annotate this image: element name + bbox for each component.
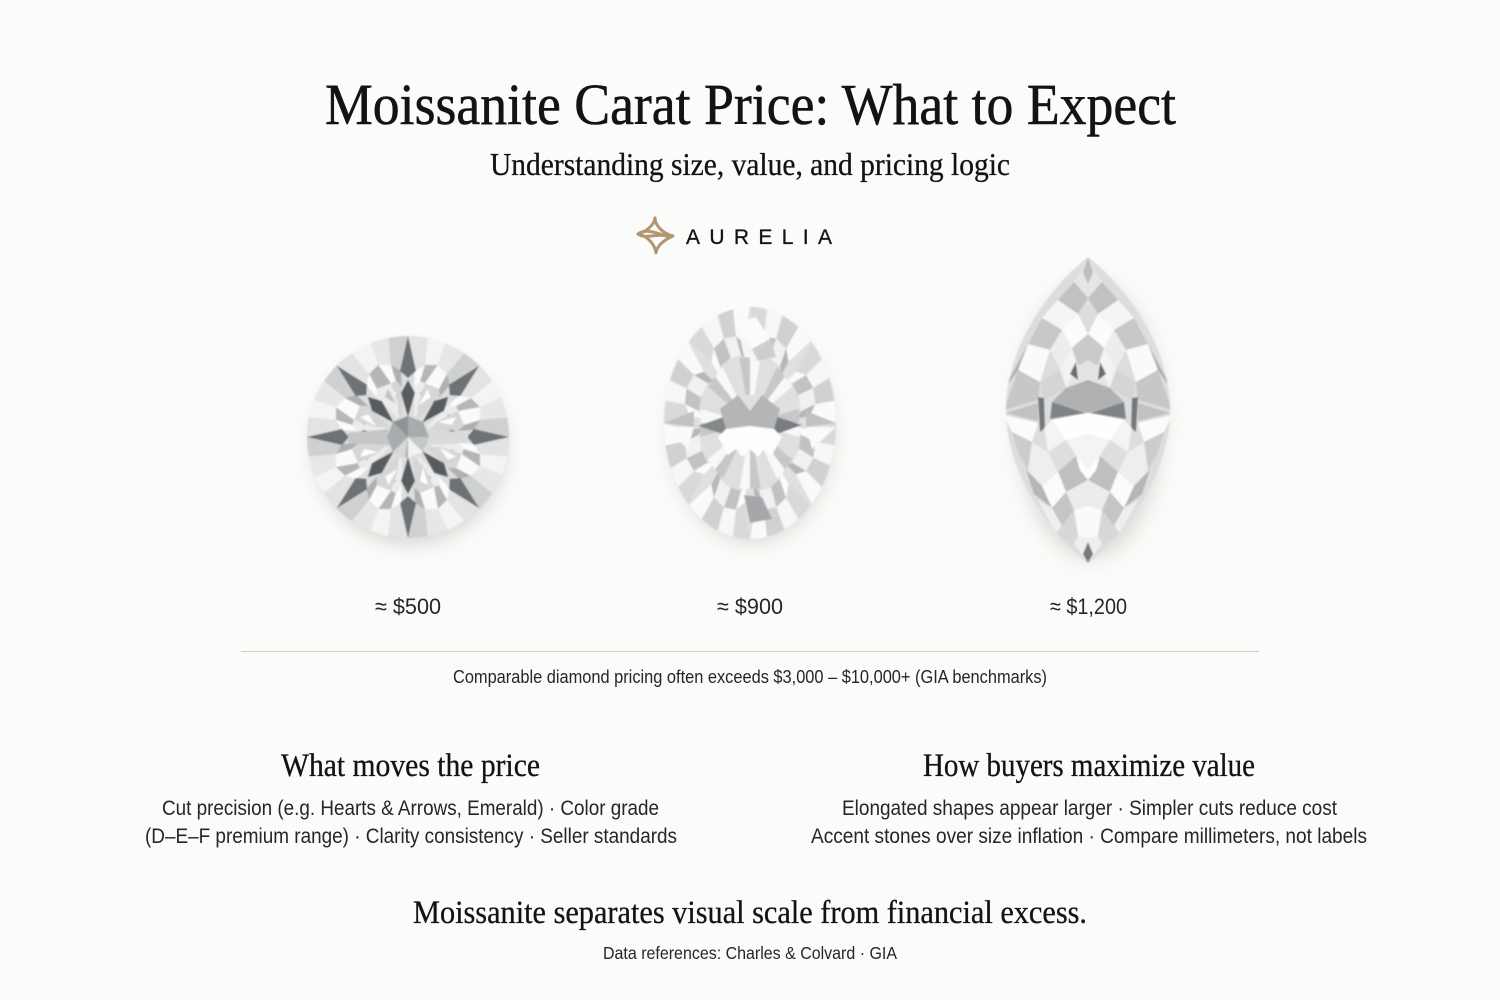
round diamond facets [306, 335, 510, 539]
body text line 1: Cut precision (e.g. Hearts & Arrows, Emerald) · Color grade [162, 796, 659, 820]
marquise diamond shadow [1018, 282, 1162, 558]
title: Moissanite Carat Price: What to Expect [325, 72, 1176, 137]
price label: round: ≈ $500 [375, 594, 441, 619]
diamond: round cut [306, 335, 510, 542]
diamond comparison note: Comparable diamond pricing often exceeds $3,000 – $10,000+ (GIA benchmarks) [453, 666, 1047, 687]
panel: how buyers maximize value [811, 748, 1367, 848]
price label: oval: ≈ $900 [717, 594, 783, 619]
oval diamond shadow [672, 326, 832, 542]
icon: logo star [638, 218, 673, 253]
heading: How buyers maximize value [923, 748, 1255, 784]
data references: Data references: Charles & Colvard · GIA [603, 943, 897, 963]
panel: what moves the price [145, 748, 677, 848]
heading: What moves the price [281, 748, 540, 784]
body text line 1: Elongated shapes appear larger · Simpler cuts reduce cost [842, 796, 1337, 820]
logo: Aurelia [638, 218, 832, 253]
diamond: marquise cut [1005, 257, 1171, 564]
diamond: oval cut [660, 304, 840, 542]
price label: marquise: ≈ $1,200 [1050, 594, 1127, 619]
subtitle: Understanding size, value, and pricing logic [490, 146, 1010, 182]
body text line 2: Accent stones over size inflation · Compare millimeters, not labels [811, 824, 1367, 848]
closing statement: Moissanite separates visual scale from financial excess. [413, 895, 1087, 931]
oval diamond facets [660, 304, 840, 542]
round diamond shadow [316, 354, 504, 542]
logo wordmark: AURELIA [686, 226, 832, 249]
marquise diamond facets [1006, 257, 1170, 564]
body text line 2: (D–E–F premium range) · Clarity consistency · Seller standards [145, 824, 677, 848]
